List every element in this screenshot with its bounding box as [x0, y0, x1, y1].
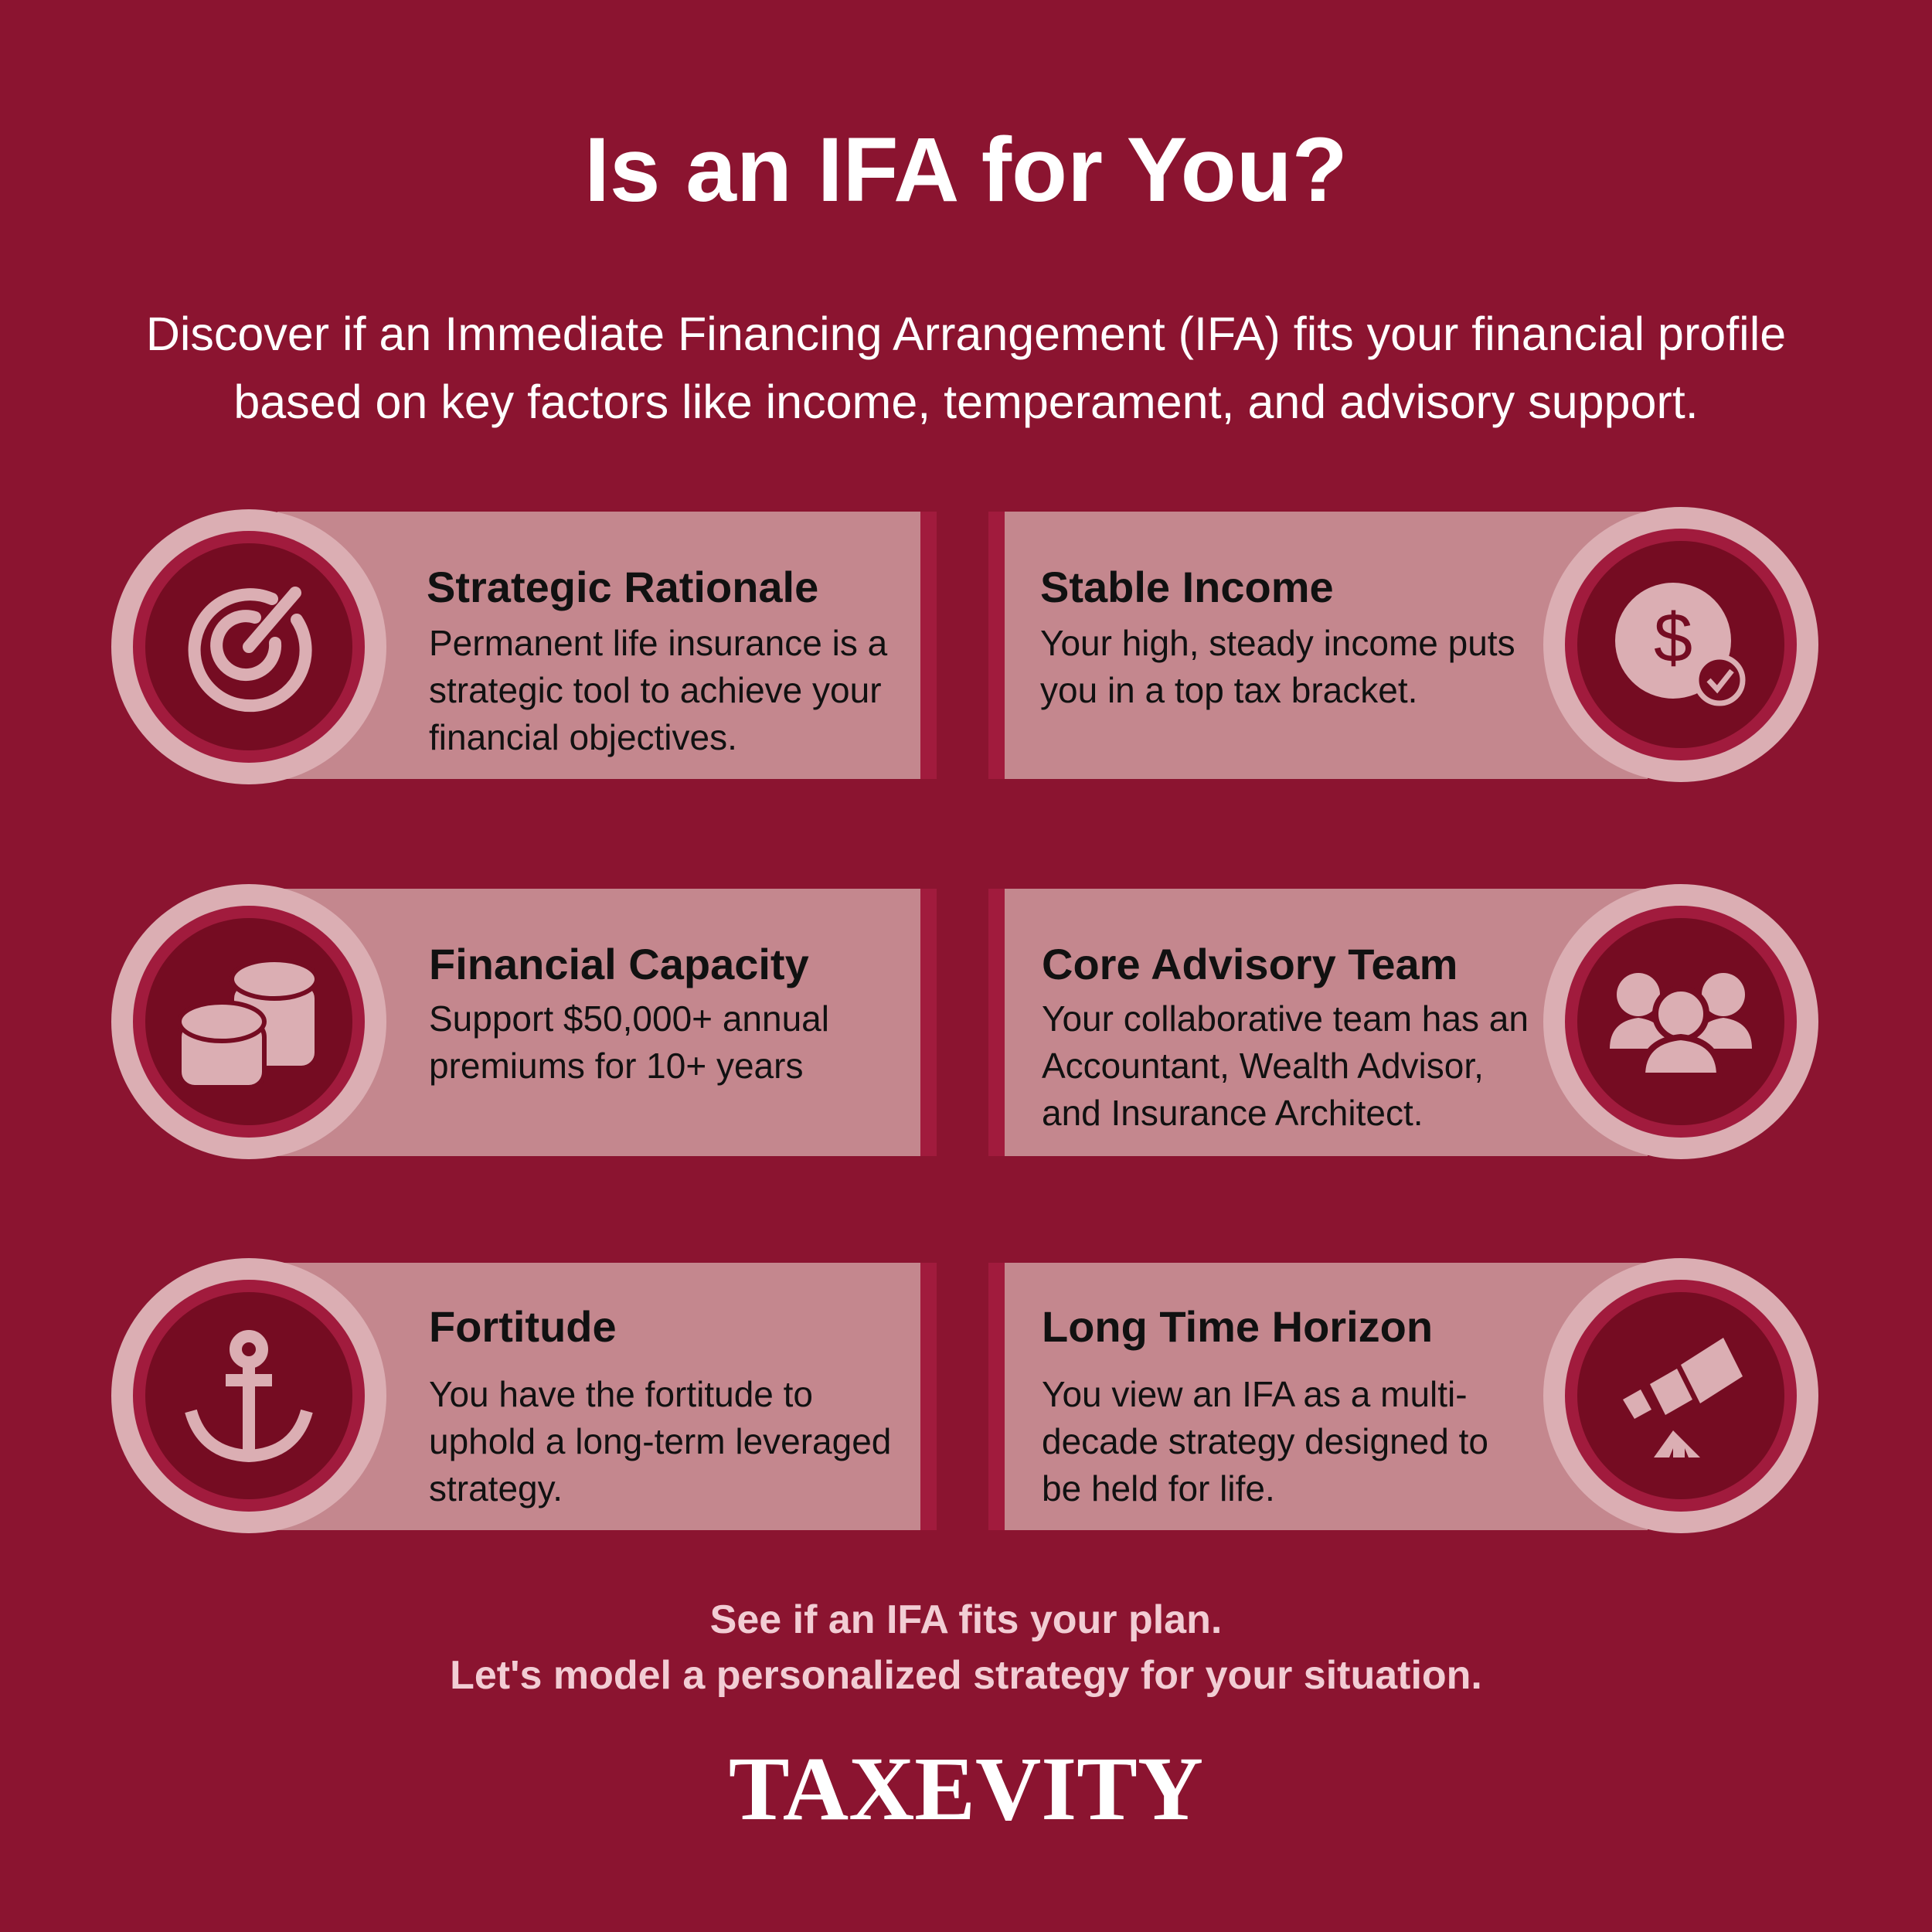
body text [1042, 998, 1529, 1133]
body text: You have the fortitude to [429, 1374, 813, 1414]
icon: dollar check [1543, 507, 1818, 782]
heading: Stable Income [1040, 563, 1334, 611]
body text: financial objectives. [429, 717, 737, 757]
icon: target [111, 509, 386, 784]
card: Strategic Rationale [277, 512, 937, 779]
subtitle: based on key factors like income, temperament, and advisory support. [233, 376, 1699, 428]
card: Core Advisory Team [988, 889, 1648, 1156]
body text: Support $50,000+ annual [429, 998, 829, 1039]
icon: team [1543, 884, 1818, 1159]
body text [1042, 1374, 1488, 1509]
body text [429, 623, 887, 757]
heading: Financial Capacity [429, 940, 809, 988]
icon: anchor [111, 1258, 386, 1533]
card: Financial Capacity [277, 889, 937, 1156]
body text: Permanent life insurance is a [429, 623, 887, 663]
body text [1040, 623, 1515, 710]
subtitle [146, 308, 1786, 428]
icon: telescope [1543, 1258, 1818, 1533]
heading: Fortitude [429, 1302, 617, 1351]
icon: dollar check: $ [1654, 600, 1692, 677]
body text: be held for life. [1042, 1468, 1275, 1509]
logo: TAXEVITY [729, 1738, 1203, 1839]
body text: uphold a long-term leveraged [429, 1421, 891, 1461]
footer call to action: See if an IFA fits your plan. [710, 1597, 1222, 1642]
subtitle: Discover if an Immediate Financing Arrangement (IFA) fits your financial profile [146, 308, 1786, 360]
body text: strategic tool to achieve your [429, 670, 882, 710]
body text: Your collaborative team has an [1042, 998, 1529, 1039]
body text: decade strategy designed to [1042, 1421, 1488, 1461]
title: Is an IFA for You? [584, 119, 1348, 221]
card: Stable Income [988, 512, 1648, 779]
body text [429, 998, 829, 1086]
heading: Long Time Horizon [1042, 1302, 1433, 1351]
card: Long Time Horizon [988, 1263, 1648, 1530]
body text [429, 1374, 891, 1509]
heading: Core Advisory Team [1042, 940, 1458, 988]
body text: you in a top tax bracket. [1040, 670, 1417, 710]
body text: You view an IFA as a multi- [1042, 1374, 1468, 1414]
heading: Strategic Rationale [427, 563, 818, 611]
footer call to action [450, 1597, 1482, 1698]
card: Fortitude [277, 1263, 937, 1530]
body text: and Insurance Architect. [1042, 1093, 1423, 1133]
icon: coins [111, 884, 386, 1159]
body text: premiums for 10+ years [429, 1046, 803, 1086]
body text: strategy. [429, 1468, 563, 1509]
footer call to action: Let's model a personalized strategy for your situation. [450, 1653, 1482, 1698]
body text: Your high, steady income puts [1040, 623, 1515, 663]
body text: Accountant, Wealth Advisor, [1042, 1046, 1484, 1086]
